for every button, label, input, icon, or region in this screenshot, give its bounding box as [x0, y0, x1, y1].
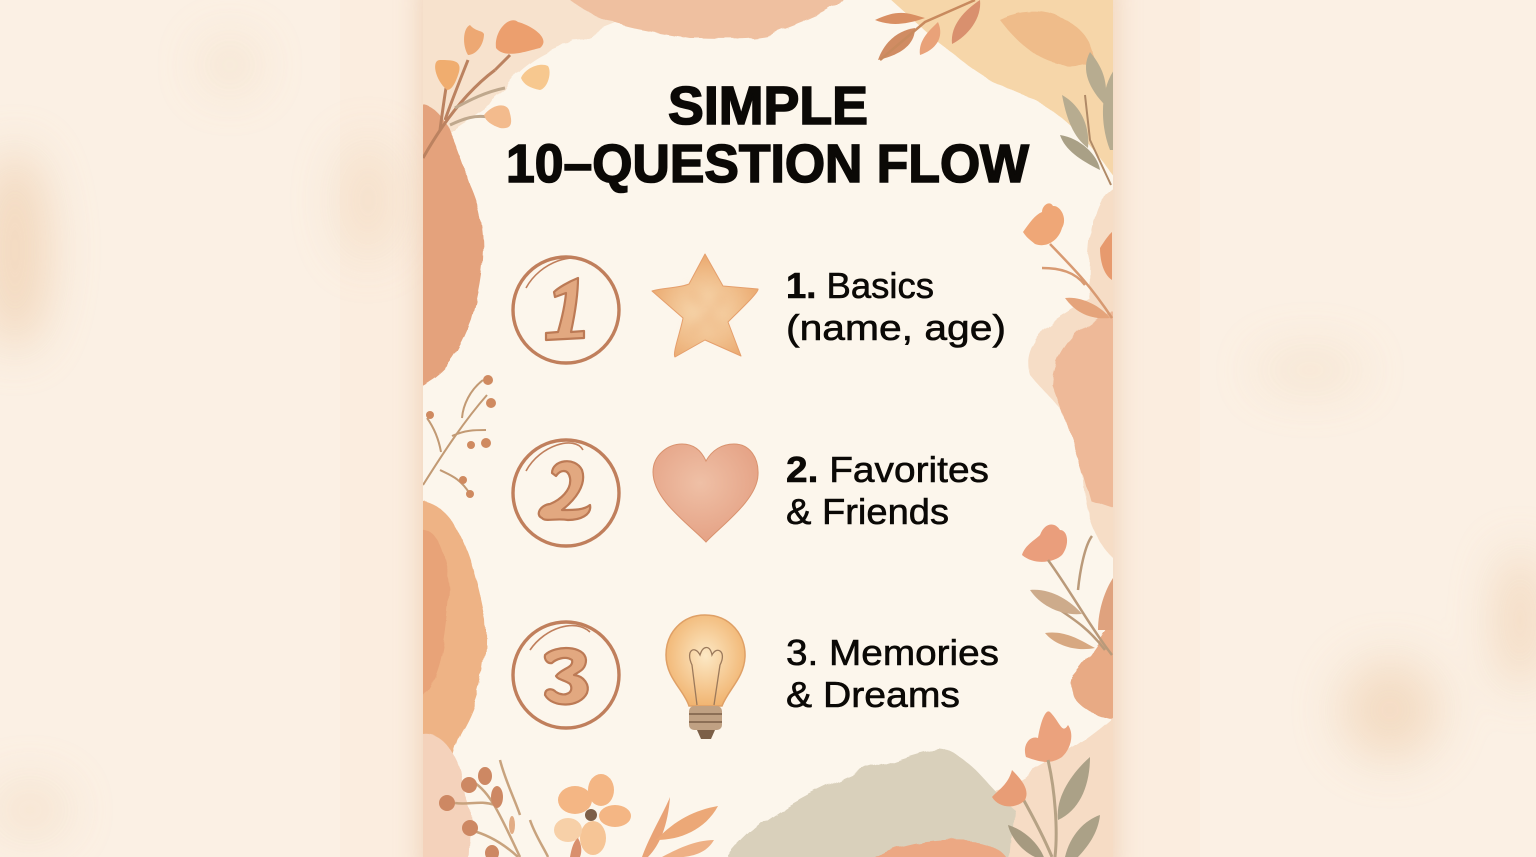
sprig bottom left	[439, 760, 548, 857]
title: SIMPLE	[668, 76, 868, 136]
title	[506, 76, 1029, 194]
step 2: label: 2. Favorites	[786, 449, 989, 490]
step 2: label	[787, 456, 988, 524]
step 2: number badge	[513, 440, 619, 546]
foliage left middle berries	[423, 375, 496, 498]
foliage right sage	[1060, 52, 1118, 185]
poster shadow	[423, 0, 1113, 857]
leaf spray bottom	[570, 797, 718, 857]
flower bottom right	[992, 711, 1100, 857]
flower bottom middle	[554, 774, 631, 855]
step 1: label: (name, age)	[786, 307, 1006, 348]
poster card	[415, 0, 1125, 857]
foliage top left	[423, 55, 510, 158]
foliage right middle flower	[1023, 203, 1112, 318]
foliage right lower	[1022, 525, 1113, 655]
step 1: number badge	[513, 257, 619, 363]
step 1: label	[786, 265, 1006, 348]
step 3: label: & Dreams	[786, 674, 960, 715]
step 3: number badge	[513, 622, 619, 728]
step 1: star icon	[652, 254, 758, 357]
watercolour border	[415, 0, 1125, 857]
step 3: label	[787, 638, 998, 708]
step 2: heart icon	[653, 444, 758, 542]
foliage top right	[875, 0, 980, 60]
step 2: label: & Friends	[786, 491, 949, 532]
step 3: label: 3. Memories	[786, 632, 999, 673]
title: 10–QUESTION FLOW	[506, 134, 1029, 194]
step 3: light bulb icon	[666, 615, 745, 739]
step 1: label: 1. Basics	[786, 265, 934, 306]
